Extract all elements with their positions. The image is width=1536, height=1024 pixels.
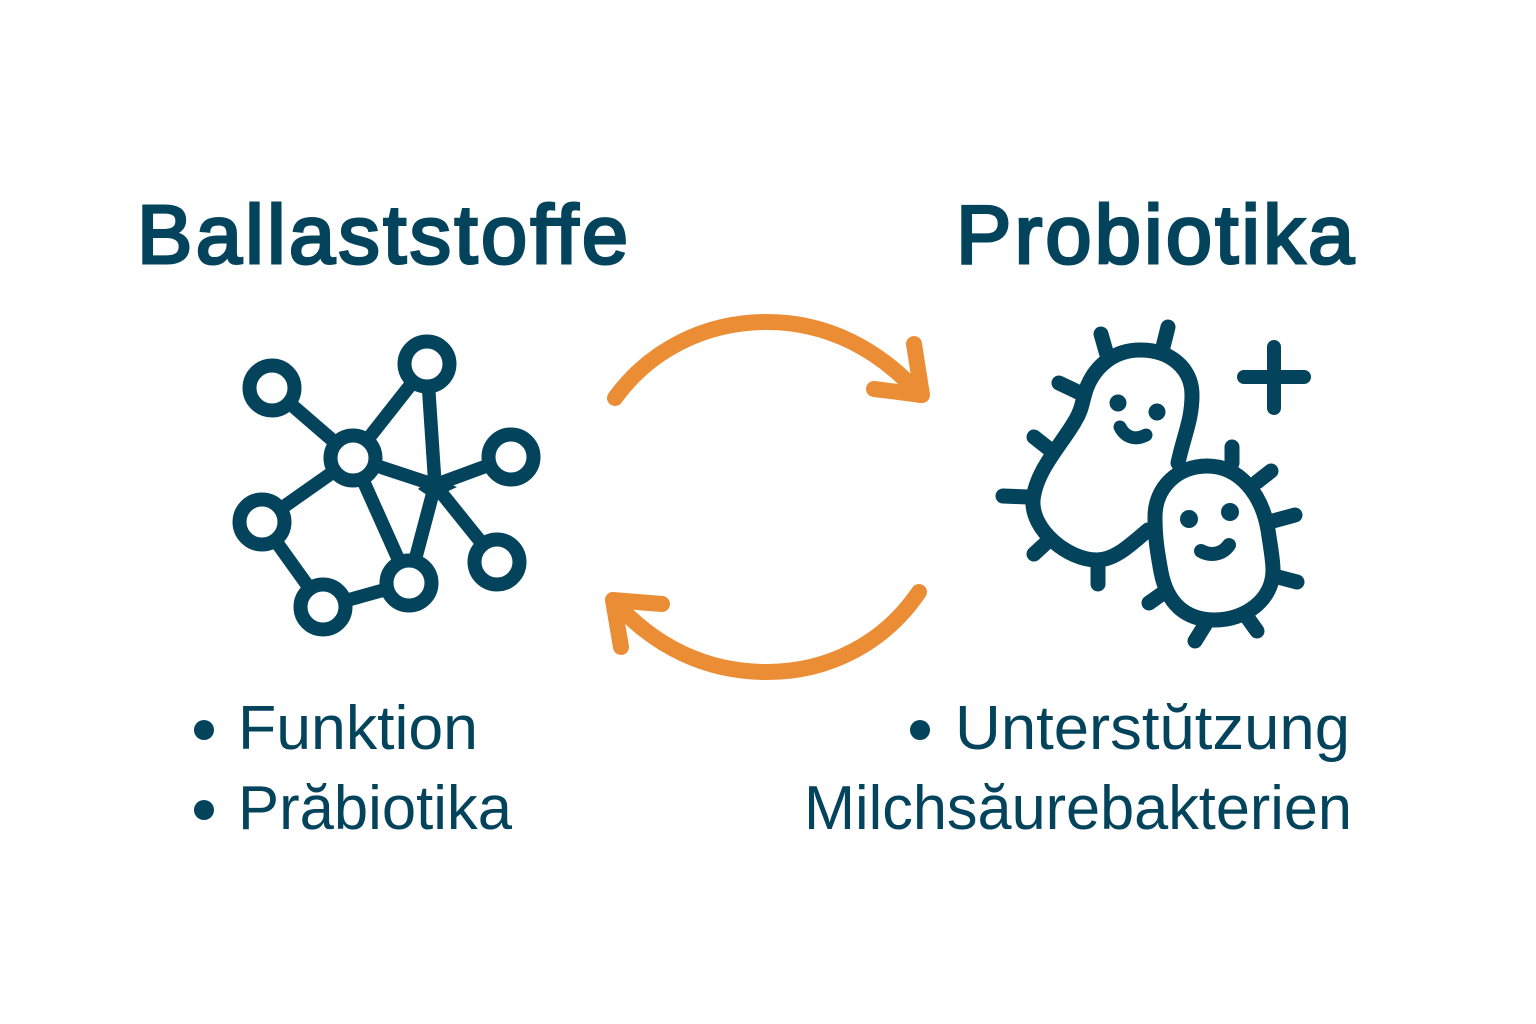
- large bacterium: [1003, 327, 1192, 584]
- right bullet list: [804, 694, 1352, 843]
- right bullet list: Unterstŭtzung: [955, 694, 1350, 763]
- icon: probiotic bacteria with plus: [1003, 327, 1304, 641]
- right bullet list: Milchsăurebakterien: [804, 774, 1352, 843]
- heading: Ballaststoffe: Ballaststoffe: [137, 188, 628, 281]
- left bullet list: [194, 694, 513, 843]
- icon: molecular network: [240, 342, 534, 630]
- left bullet list: Prăbiotika: [238, 774, 513, 843]
- arrow: bottom curved arrow to the left: [613, 592, 919, 672]
- plus sign: [1244, 347, 1304, 408]
- heading: Probiotika: Probiotika: [956, 188, 1355, 281]
- arrow: top curved arrow to the right: [615, 322, 922, 398]
- left bullet list: Funktion: [238, 694, 478, 763]
- small bacterium: [1149, 447, 1297, 641]
